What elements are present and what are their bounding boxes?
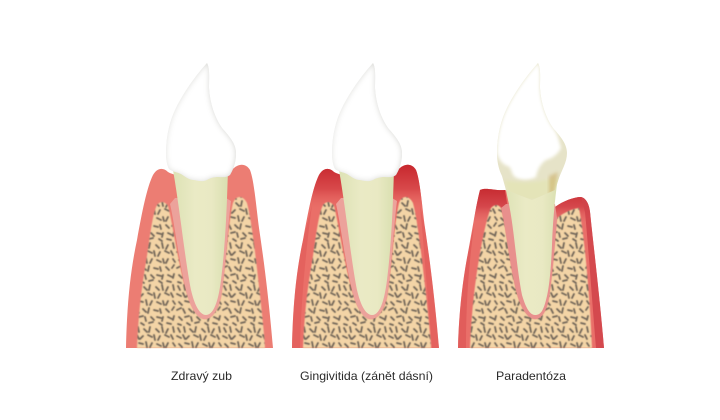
periodontal ligament	[170, 198, 231, 319]
exposed root	[503, 170, 559, 315]
bone	[137, 197, 265, 348]
receded gum	[458, 189, 604, 348]
periodontal ligament	[501, 204, 557, 319]
periodontal ligament	[336, 198, 397, 319]
panel: periodontitis tooth	[458, 60, 604, 348]
panel: healthy tooth	[126, 60, 273, 348]
stained crown	[497, 63, 567, 199]
bone	[470, 205, 592, 348]
label: gingivitis: Gingivitida (zánět dásní)	[300, 370, 433, 383]
gum	[126, 165, 273, 348]
label: periodontitis: Paradentóza	[496, 370, 567, 383]
root	[339, 170, 394, 315]
crown	[166, 63, 236, 182]
label: healthy tooth: Zdravý zub	[171, 370, 232, 383]
crown	[332, 63, 402, 182]
root	[173, 170, 228, 315]
inflamed gum	[292, 165, 439, 348]
bone	[303, 197, 431, 348]
panel: gingivitis tooth	[292, 60, 439, 348]
